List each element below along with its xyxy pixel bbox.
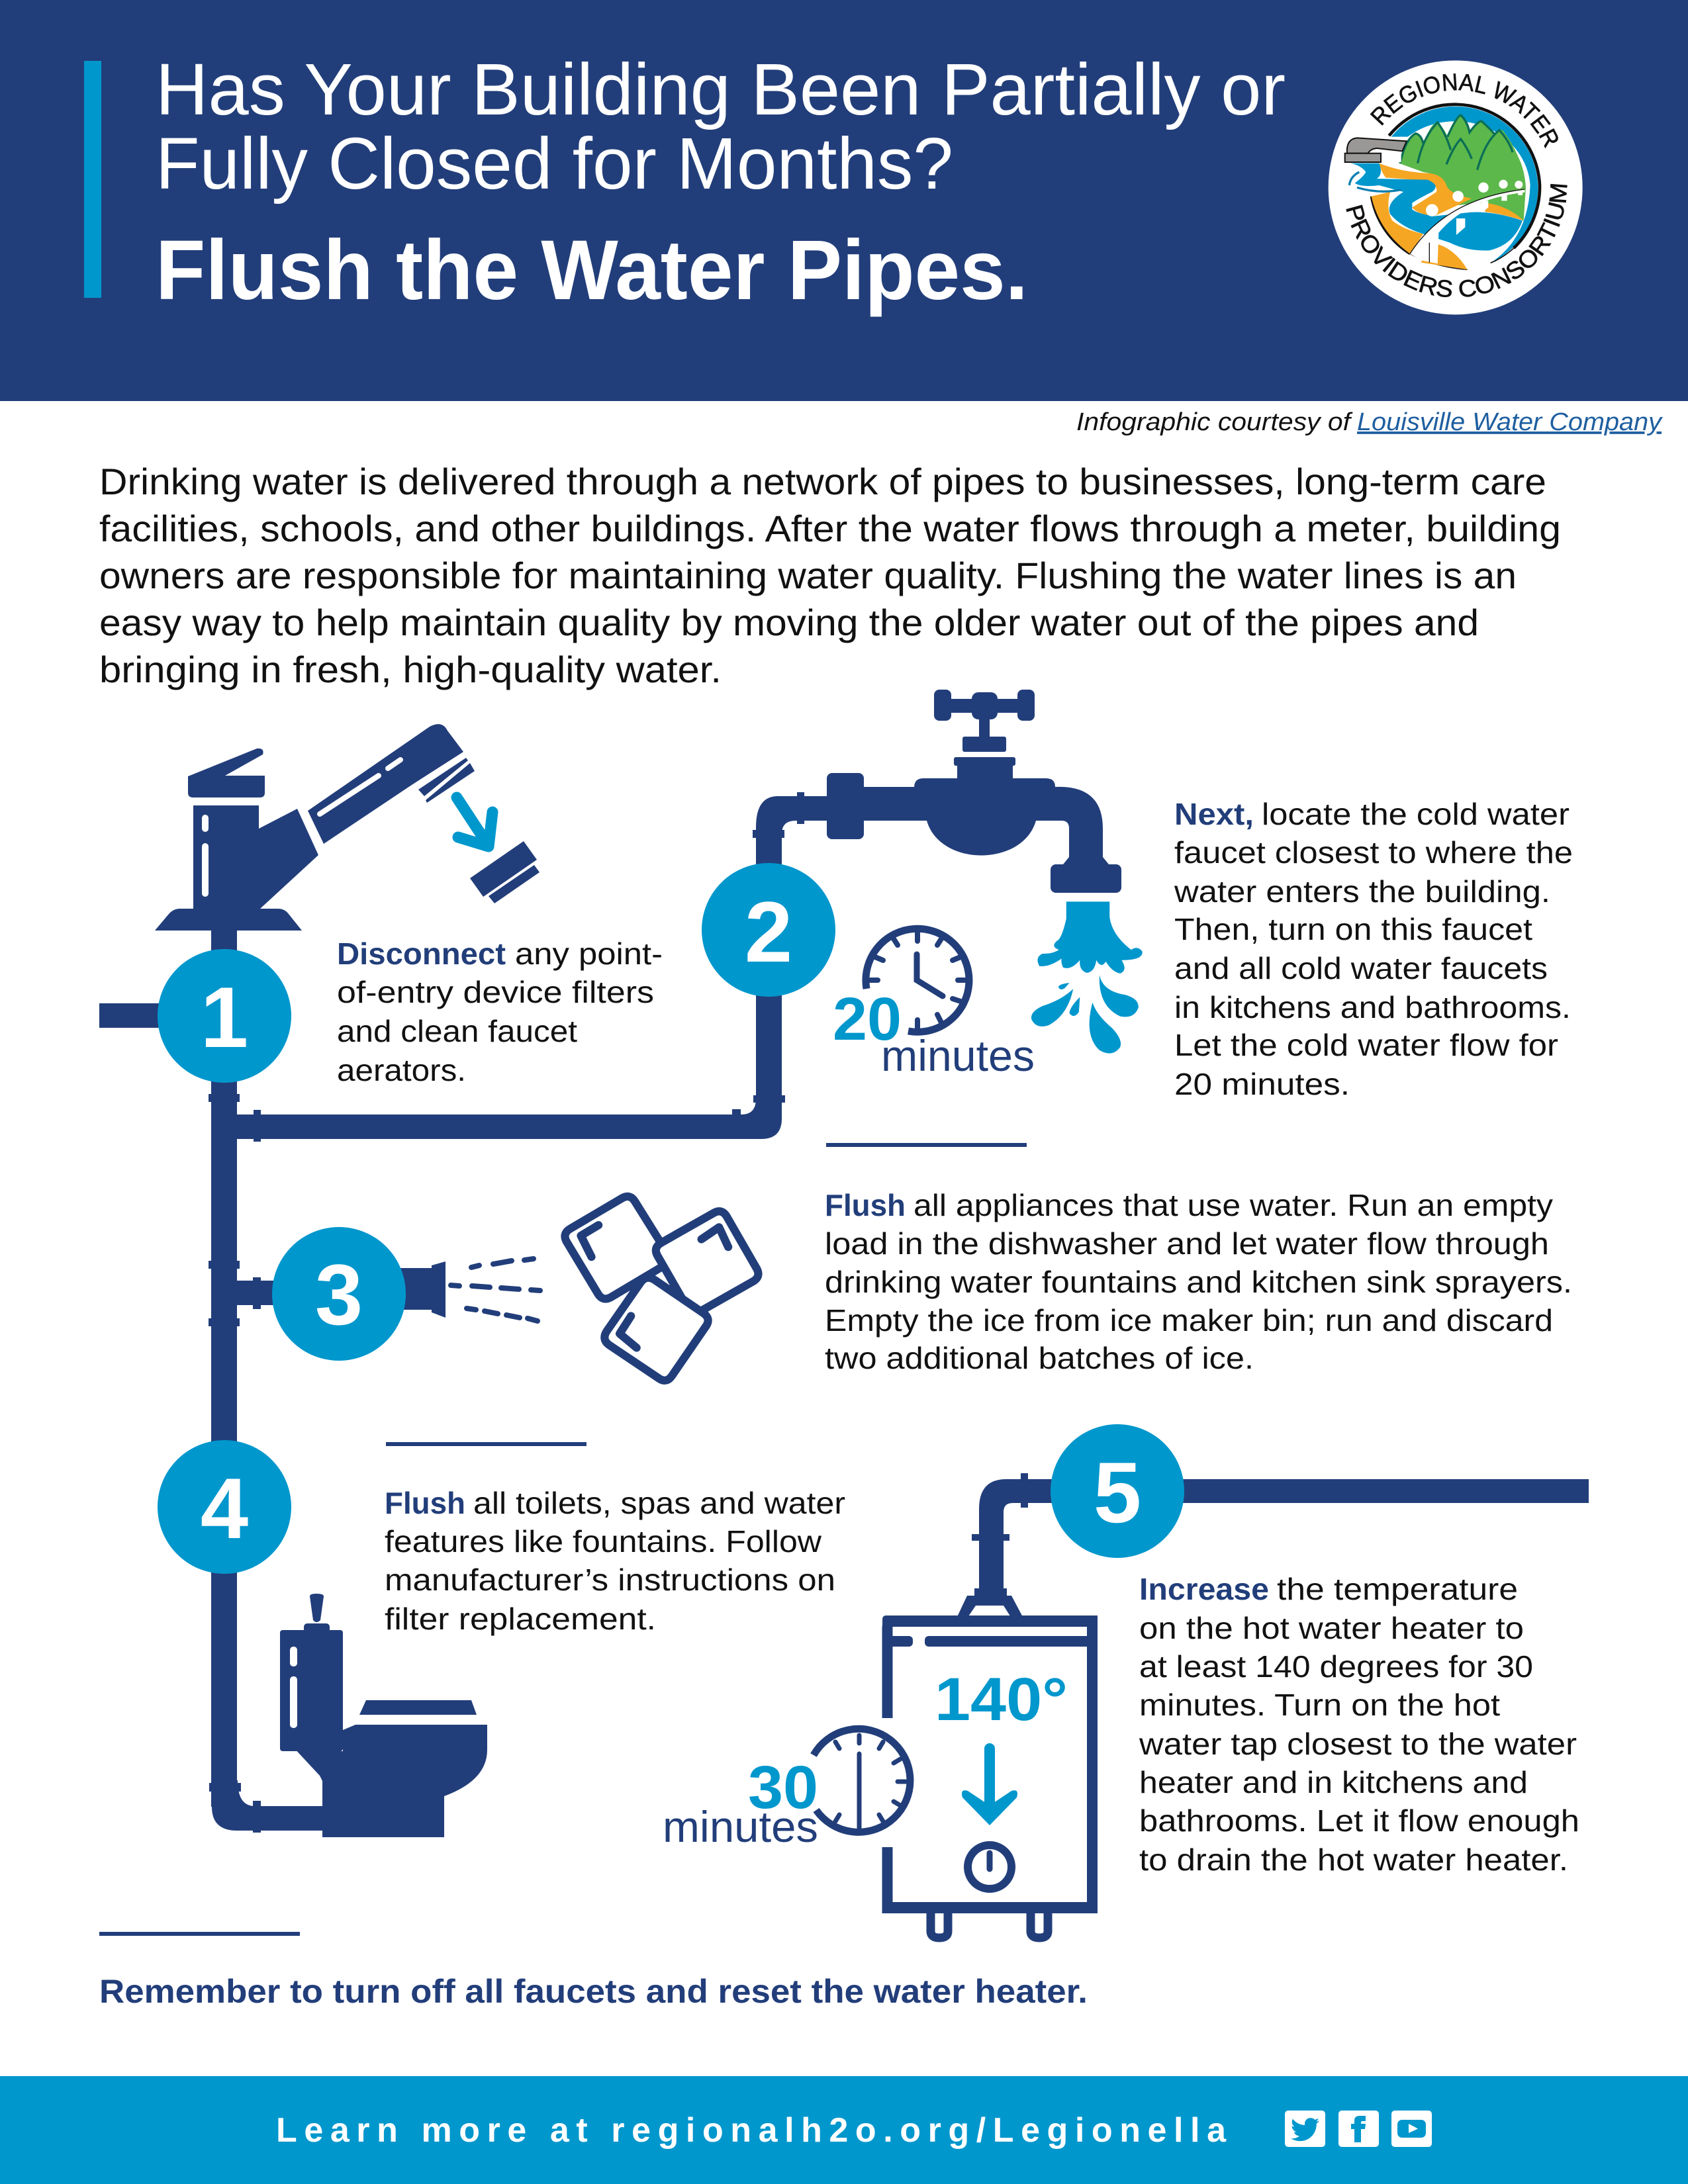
- logo: Regional Water Providers Consortium: [1328, 60, 1583, 315]
- step 5 text: on the hot water heater to: [1139, 1611, 1524, 1645]
- step 3 text: load in the dishwasher and let water flow through: [825, 1226, 1549, 1261]
- step 4 badge: 4: [201, 1460, 248, 1557]
- step 2 text: 20 minutes.: [1174, 1067, 1350, 1101]
- step 2 text: Let the cold water flow for: [1174, 1028, 1558, 1062]
- step 1 text: aerators.: [337, 1053, 466, 1087]
- icon: ice cubes: [565, 1197, 758, 1381]
- credit line: Infographic courtesy of: [1076, 408, 1353, 436]
- step 5 text: to drain the hot water heater.: [1139, 1843, 1568, 1877]
- intro paragraph: [99, 461, 1561, 690]
- icon: toilet: [280, 1594, 487, 1837]
- intro paragraph: easy way to help maintain quality by moving the older water out of the pipes and: [99, 602, 1479, 643]
- step 5 text: [1139, 1572, 1579, 1877]
- step 1 badge: 1: [201, 969, 248, 1066]
- step 5 text: at least 140 degrees for 30: [1139, 1649, 1533, 1684]
- footer link text: Learn more at regionalh2o.org/Legionella: [276, 2111, 1227, 2150]
- step 3 text: Flush: [825, 1188, 906, 1222]
- 30 minutes clock: 30: [748, 1754, 818, 1821]
- step 5 text: the temperature: [1277, 1572, 1518, 1606]
- step 2 text: locate the cold water: [1262, 797, 1570, 831]
- step 2 badge: 2: [745, 884, 792, 980]
- step 4 text: all toilets, spas and water: [473, 1486, 845, 1520]
- logo ring text: PROVIDERS CONSORTIUM: [1346, 184, 1568, 297]
- step 1 text: [337, 936, 663, 1087]
- step 2 text: and all cold water faucets: [1174, 951, 1548, 985]
- intro paragraph: facilities, schools, and other buildings. After the water flows through a meter, building: [99, 508, 1561, 549]
- step 2 text: Then, turn on this faucet: [1174, 912, 1532, 946]
- step 4 text: features like fountains. Follow: [385, 1524, 822, 1559]
- step 3: sprayer: [397, 1259, 540, 1321]
- step 2 text: in kitchens and bathrooms.: [1174, 990, 1571, 1024]
- step 5 text: water tap closest to the water: [1139, 1727, 1577, 1761]
- step 2 text: [1174, 797, 1573, 1101]
- step 1 badge: [158, 949, 291, 1083]
- step 5: pipe to heater: [972, 1473, 1589, 1595]
- step 3 badge: 3: [315, 1246, 363, 1343]
- 30 minutes clock: minutes: [663, 1802, 818, 1851]
- step 3 text: drinking water fountains and kitchen sink sprayers.: [825, 1265, 1572, 1299]
- intro paragraph: Drinking water is delivered through a network of pipes to businesses, long-term care: [99, 461, 1546, 502]
- step 1 text: and clean faucet: [337, 1014, 577, 1048]
- title: Has Your Building Been Partially or: [156, 49, 1286, 130]
- step 3 badge: [272, 1227, 406, 1361]
- icon: power: [968, 1845, 1011, 1889]
- step 1 text: of-entry device filters: [337, 975, 654, 1009]
- arrow: down: [962, 1743, 1017, 1825]
- arrow: remove aerator: [457, 797, 492, 846]
- step 5 text: bathrooms. Let it flow enough: [1139, 1803, 1579, 1838]
- water splash: [1031, 901, 1143, 1054]
- step 3 text: Empty the ice from ice maker bin; run and discard: [825, 1303, 1553, 1338]
- main pipe network: [99, 927, 785, 1833]
- step 4 text: Flush: [385, 1486, 465, 1520]
- step 4 badge: [158, 1440, 291, 1574]
- step 2 badge: [702, 863, 835, 997]
- step 2 text: faucet closest to where the: [1174, 835, 1573, 870]
- step 5 text: heater and in kitchens and: [1139, 1765, 1528, 1799]
- 140 degrees: 140°: [935, 1666, 1068, 1733]
- logo ring text: REGIONAL WATER: [1370, 73, 1558, 148]
- step 3 text: two additional batches of ice.: [825, 1341, 1254, 1375]
- step 1 text: any point-: [515, 936, 663, 971]
- logo ring text: [1346, 73, 1568, 297]
- step 4 text: [385, 1486, 845, 1636]
- step 3 text: [825, 1188, 1572, 1375]
- credit line: Louisville Water Company: [1357, 408, 1663, 436]
- step 5 text: Increase: [1139, 1572, 1269, 1606]
- 20 minutes clock: 20: [833, 985, 902, 1053]
- icon: twitter: [1285, 2111, 1325, 2147]
- title: Flush the Water Pipes.: [156, 223, 1028, 318]
- title: Fully Closed for Months?: [156, 123, 953, 205]
- step 2: tap icon: [753, 690, 1121, 999]
- intro paragraph: bringing in fresh, high-quality water.: [99, 649, 722, 690]
- icon: water heater: [882, 1588, 1097, 1938]
- 20 minutes clock: [833, 929, 1035, 1080]
- title: [156, 49, 1286, 318]
- header banner: [0, 0, 1688, 401]
- step 1 text: Disconnect: [337, 936, 506, 971]
- 30 minutes clock: [663, 1729, 910, 1851]
- footer bar: [0, 2076, 1688, 2184]
- step 4 text: filter replacement.: [385, 1602, 656, 1636]
- step 5 badge: 5: [1094, 1444, 1141, 1541]
- step 1: faucet icon: [155, 724, 539, 931]
- step 2 text: Next,: [1174, 797, 1254, 831]
- icon: facebook: [1338, 2111, 1379, 2147]
- step 3 text: all appliances that use water. Run an empty: [914, 1188, 1553, 1222]
- step 4 text: manufacturer’s instructions on: [385, 1563, 835, 1597]
- reminder: Remember to turn off all faucets and reset the water heater.: [99, 1973, 1088, 2010]
- intro paragraph: owners are responsible for maintaining water quality. Flushing the water lines is an: [99, 555, 1517, 596]
- step 2 text: water enters the building.: [1174, 874, 1550, 909]
- step 5 text: minutes. Turn on the hot: [1139, 1688, 1500, 1722]
- icon: youtube: [1391, 2111, 1432, 2147]
- credit line: [1076, 408, 1663, 436]
- accent bar: [84, 61, 101, 298]
- step 5 badge: [1051, 1424, 1184, 1558]
- 20 minutes clock: minutes: [881, 1031, 1035, 1080]
